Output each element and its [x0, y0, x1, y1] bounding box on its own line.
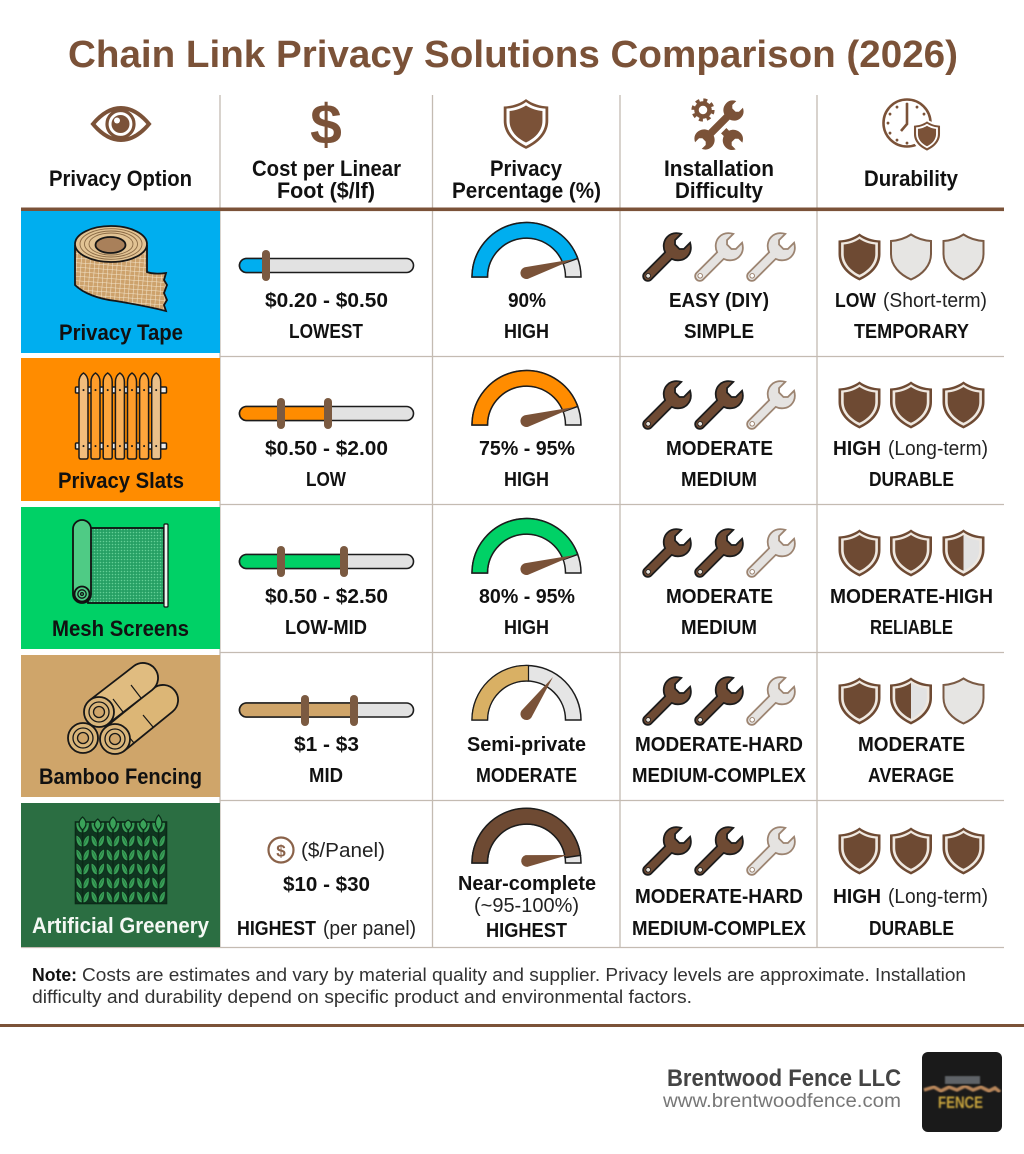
durability: [833, 382, 988, 491]
cost slider: MID: [309, 765, 343, 787]
icon: eye: [93, 108, 149, 140]
privacy gauge: 75% - 95%: [479, 438, 575, 460]
cost slider: $0.50 - $2.00: [265, 438, 388, 460]
header: privacy option: [49, 108, 192, 191]
privacy gauge: [472, 223, 581, 343]
panel: privacy tape: Privacy Tape: [59, 320, 183, 345]
footer: company name: Brentwood Fence LLC: [667, 1065, 901, 1092]
cost slider: LOW: [306, 469, 346, 491]
installation difficulty: MODERATE-HARD: [635, 734, 803, 756]
cost slider: $0.50 - $2.50: [265, 586, 388, 608]
row: bamboo fencing: [21, 655, 984, 797]
installation difficulty: [635, 524, 800, 639]
footer: logo: FENCE: [938, 1093, 983, 1112]
privacy gauge: HIGH: [504, 321, 549, 343]
privacy gauge: [472, 519, 581, 639]
cost per panel: ($/Panel): [301, 840, 385, 862]
installation difficulty: EASY (DIY): [669, 290, 769, 312]
footer: company name: www.brentwoodfence.com: [662, 1091, 901, 1112]
durability: HIGH: [833, 886, 881, 908]
footer: company name: [662, 1065, 901, 1112]
footer: logo: [922, 1052, 1002, 1132]
icon: clock with shield: [884, 100, 942, 153]
durability: MODERATE-HIGH: [830, 586, 993, 608]
panel: privacy tape: [21, 211, 220, 353]
panel: artificial greenery: Artificial Greenery: [32, 913, 210, 938]
panel: privacy slats: [21, 358, 220, 501]
panel: bamboo fencing: Bamboo Fencing: [39, 764, 202, 789]
privacy gauge: (~95-100%): [474, 895, 579, 917]
durability: [838, 678, 984, 787]
privacy gauge: 90%: [508, 290, 546, 312]
installation difficulty: [635, 228, 800, 343]
installation difficulty: MODERATE: [666, 586, 773, 608]
durability: RELIABLE: [870, 617, 953, 639]
durability: MODERATE: [858, 734, 965, 756]
installation difficulty: SIMPLE: [684, 321, 754, 343]
table header: [21, 93, 1004, 211]
row: privacy tape: [21, 211, 987, 353]
cost slider: [240, 250, 414, 343]
installation difficulty: [632, 822, 807, 940]
durability: DURABLE: [869, 469, 954, 491]
durability: (Short-term): [883, 290, 987, 312]
icon: bamboo logs: [68, 663, 178, 754]
cost per panel: HIGHEST: [237, 918, 316, 940]
durability: (Long-term): [888, 886, 988, 908]
icon: tools: [691, 97, 747, 153]
durability: [830, 530, 993, 639]
panel: artificial greenery: [21, 803, 220, 947]
row: artificial greenery: [21, 803, 988, 947]
row: privacy slats: [21, 358, 988, 501]
privacy gauge: Near-complete: [458, 873, 596, 895]
privacy gauge: Semi-private: [467, 734, 586, 756]
durability: AVERAGE: [868, 765, 954, 787]
cost slider: [240, 546, 414, 639]
installation difficulty: [632, 672, 807, 787]
panel: mesh screens: [21, 507, 220, 649]
icon: mesh roll: [73, 520, 168, 607]
note: Costs are estimates and vary by material quality and supplier. Privacy levels are approximate. Installation: [82, 965, 966, 985]
note: [32, 965, 966, 1007]
header: durability: Durability: [864, 166, 959, 191]
header: durability: [864, 100, 959, 191]
privacy gauge: HIGH: [504, 469, 549, 491]
icon: shield: [504, 99, 548, 149]
installation difficulty: MODERATE: [666, 438, 773, 460]
privacy gauge: HIGH: [504, 617, 549, 639]
durability: (Long-term): [888, 438, 988, 460]
header: installation difficulty: Installation: [664, 156, 774, 181]
header: privacy option: Privacy Option: [49, 166, 192, 191]
durability: TEMPORARY: [854, 321, 970, 343]
cost slider: $1 - $3: [294, 734, 359, 756]
header: cost per linear foot: Cost per Linear: [252, 156, 401, 181]
panel: bamboo fencing: [21, 655, 220, 797]
installation difficulty: MEDIUM: [681, 469, 757, 491]
cost slider: [240, 398, 414, 491]
panel: mesh screens: Mesh Screens: [52, 616, 189, 641]
installation difficulty: MEDIUM: [681, 617, 757, 639]
privacy gauge: MODERATE: [476, 765, 577, 787]
installation difficulty: [635, 376, 800, 491]
privacy gauge: [467, 665, 586, 787]
cost per panel: $10 - $30: [283, 874, 370, 896]
header: installation difficulty: [664, 97, 774, 203]
cost slider: [240, 695, 414, 787]
header: installation difficulty: Difficulty: [675, 178, 764, 203]
cost per panel: (per panel): [323, 918, 416, 940]
privacy gauge: [472, 371, 581, 491]
privacy gauge: 80% - 95%: [479, 586, 575, 608]
note: difficulty and durability depend on specific product and environmental factors.: [32, 987, 692, 1007]
header: privacy percentage: Privacy: [490, 156, 563, 181]
durability: HIGH: [833, 438, 881, 460]
installation difficulty: MEDIUM-COMPLEX: [632, 765, 807, 787]
durability: [833, 828, 988, 940]
cost slider: LOWEST: [289, 321, 363, 343]
privacy gauge: HIGHEST: [486, 920, 567, 942]
cost slider: LOW-MID: [285, 617, 367, 639]
privacy gauge: [458, 808, 596, 942]
durability: LOW: [835, 290, 876, 312]
header: privacy percentage: Percentage (%): [452, 178, 601, 203]
icon: dollar coin: $: [276, 842, 286, 860]
header: privacy percentage: [452, 99, 601, 203]
row: mesh screens: [21, 507, 993, 649]
icon: tape roll: [75, 226, 167, 311]
cost per panel: [237, 838, 416, 940]
title: Chain Link Privacy Solutions Comparison (2026): [68, 34, 958, 76]
header: cost per linear foot: Foot ($/lf): [277, 178, 375, 203]
icon: fence slats: [76, 373, 166, 459]
icon: dollar coin: [268, 838, 294, 862]
panel: privacy slats: Privacy Slats: [58, 468, 184, 493]
header: cost per linear foot: [252, 93, 401, 203]
icon: leaf wall: [76, 815, 166, 904]
icon: dollar sign: $: [310, 93, 342, 157]
durability: [835, 234, 987, 343]
note: Note:: [32, 965, 77, 985]
installation difficulty: MODERATE-HARD: [635, 886, 803, 908]
installation difficulty: MEDIUM-COMPLEX: [632, 918, 807, 940]
durability: DURABLE: [869, 918, 954, 940]
cost slider: $0.20 - $0.50: [265, 290, 388, 312]
